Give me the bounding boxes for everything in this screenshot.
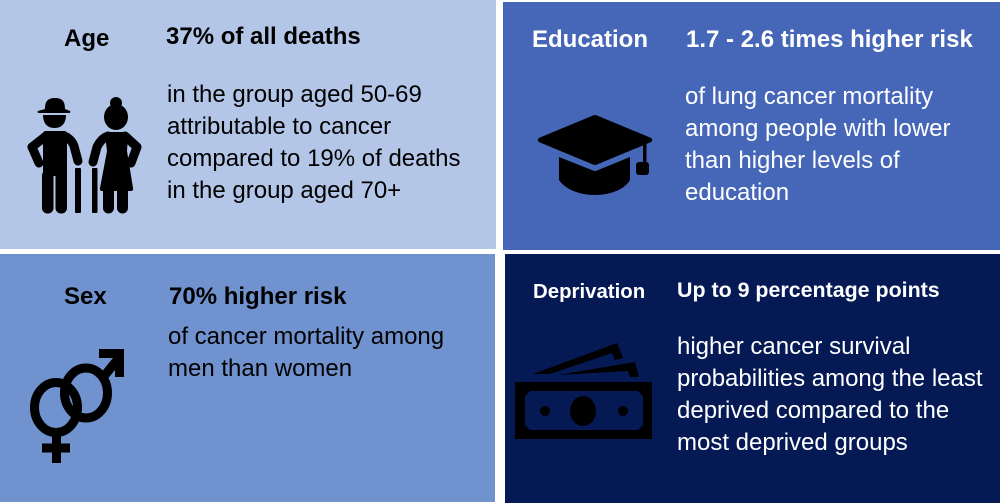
icon: male and female symbols: [30, 349, 124, 463]
heading: education: Education: [532, 26, 648, 53]
icon: banknotes: [515, 343, 652, 439]
stat: up to 9 percentage points: Up to 9 percentage points: [677, 278, 940, 302]
text: deprivation description: deprived compared to the: [677, 397, 949, 424]
text: deprivation description: [677, 333, 983, 456]
text: education description: [685, 83, 950, 206]
stat: 1.7 - 2.6 times higher risk: 1.7 - 2.6 times higher risk: [686, 26, 973, 53]
panel: deprivation: [505, 254, 1000, 503]
text: education description: education: [685, 179, 789, 206]
text: education description: of lung cancer mortality: [685, 83, 933, 110]
panel: age: [0, 0, 496, 249]
panel: sex: [0, 254, 495, 502]
icon: older couple: [27, 97, 142, 214]
panel: education: [503, 2, 1000, 250]
heading: age: Age: [64, 25, 109, 52]
text: age description: compared to 19% of deaths: [167, 145, 461, 172]
text: age description: in the group aged 50-69: [167, 81, 422, 108]
text: age description: attributable to cancer: [167, 113, 391, 140]
text: deprivation description: higher cancer survival: [677, 333, 910, 360]
text: age description: in the group aged 70+: [167, 177, 401, 204]
heading: sex: Sex: [64, 283, 107, 310]
text: education description: than higher levels of: [685, 147, 900, 174]
text: sex description: [168, 323, 444, 382]
text: age description: [167, 81, 461, 204]
text: sex description: of cancer mortality among: [168, 323, 444, 350]
icon: graduation cap: [538, 115, 652, 195]
text: deprivation description: probabilities among the least: [677, 365, 983, 392]
text: deprivation description: most deprived groups: [677, 429, 908, 456]
text: sex description: men than women: [168, 355, 352, 382]
stat: 37% of all deaths: 37% of all deaths: [166, 23, 361, 50]
stat: 70% higher risk: 70% higher risk: [169, 283, 346, 310]
text: education description: among people with lower: [685, 115, 950, 142]
heading: deprivation: Deprivation: [533, 281, 645, 303]
